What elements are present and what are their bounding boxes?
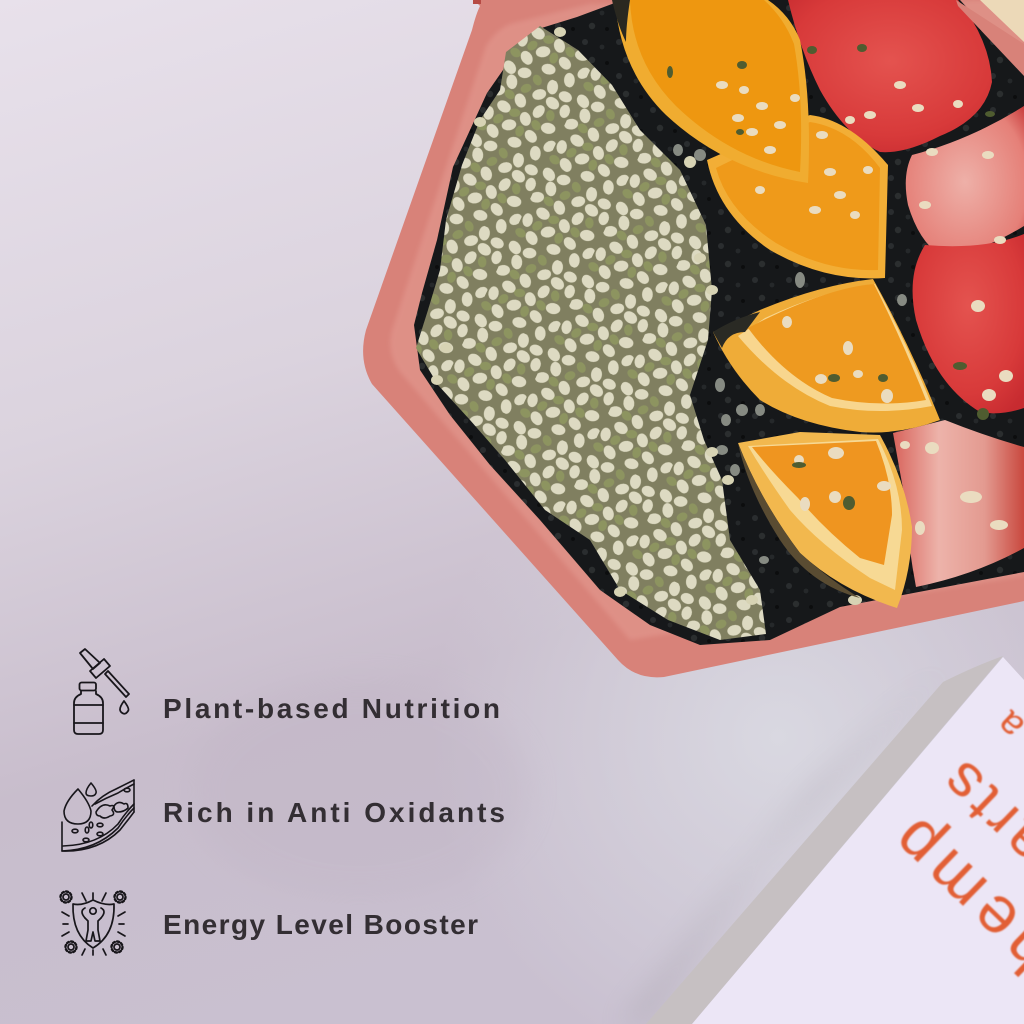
- strawberry slice: lower right: [893, 420, 1024, 587]
- strawberry slice: top: [788, 0, 992, 152]
- box: rotated brand text: [871, 702, 1024, 989]
- label: plant-based nutrition: Plant-based Nutrition: [163, 693, 500, 724]
- seeds: extra scattered grains: [431, 27, 862, 605]
- benefit row: plant-based nutrition: [74, 649, 500, 734]
- icon: dropper bottle: [74, 649, 129, 734]
- dish rim and wooden board: top right: [956, 0, 1024, 76]
- icon: shield with strong figure: [60, 892, 126, 955]
- dish: red fleck at top edge: [473, 0, 481, 4]
- orange slice 1: [612, 0, 809, 183]
- puree: dark acai base: [414, 0, 1024, 645]
- icon: artery and droplets: [62, 780, 134, 851]
- dish: pink hexagonal bowl: [363, 0, 1024, 677]
- label: energy level booster: Energy Level Booster: [163, 909, 478, 940]
- hemp seeds scattered on fruit: [667, 44, 1013, 535]
- box: grey side edge: [646, 656, 1003, 1024]
- strawberry slice: right upper: [906, 106, 1024, 258]
- strawberry slice: right middle: [913, 234, 1024, 413]
- orange slice 1: charred corner: [612, 0, 630, 42]
- benefit row: rich in anti oxidants: [62, 780, 505, 851]
- orange slice 4: [738, 432, 912, 608]
- puree: faint seeds on dark base: [673, 144, 907, 564]
- benefit row: energy level booster: [60, 892, 478, 955]
- orange slice 3: [713, 279, 940, 432]
- orange slice 3: charred tip: [713, 312, 760, 348]
- box: white front face: [692, 657, 1024, 1024]
- orange slice 4: charred rind: [738, 443, 860, 598]
- label: rich in anti oxidants: Rich in Anti Oxidants: [163, 797, 505, 828]
- product box: [620, 656, 1024, 1024]
- orange slice 2: [707, 115, 888, 278]
- hemp seeds heap: [416, 26, 862, 640]
- box: side face shadow: [620, 668, 948, 1024]
